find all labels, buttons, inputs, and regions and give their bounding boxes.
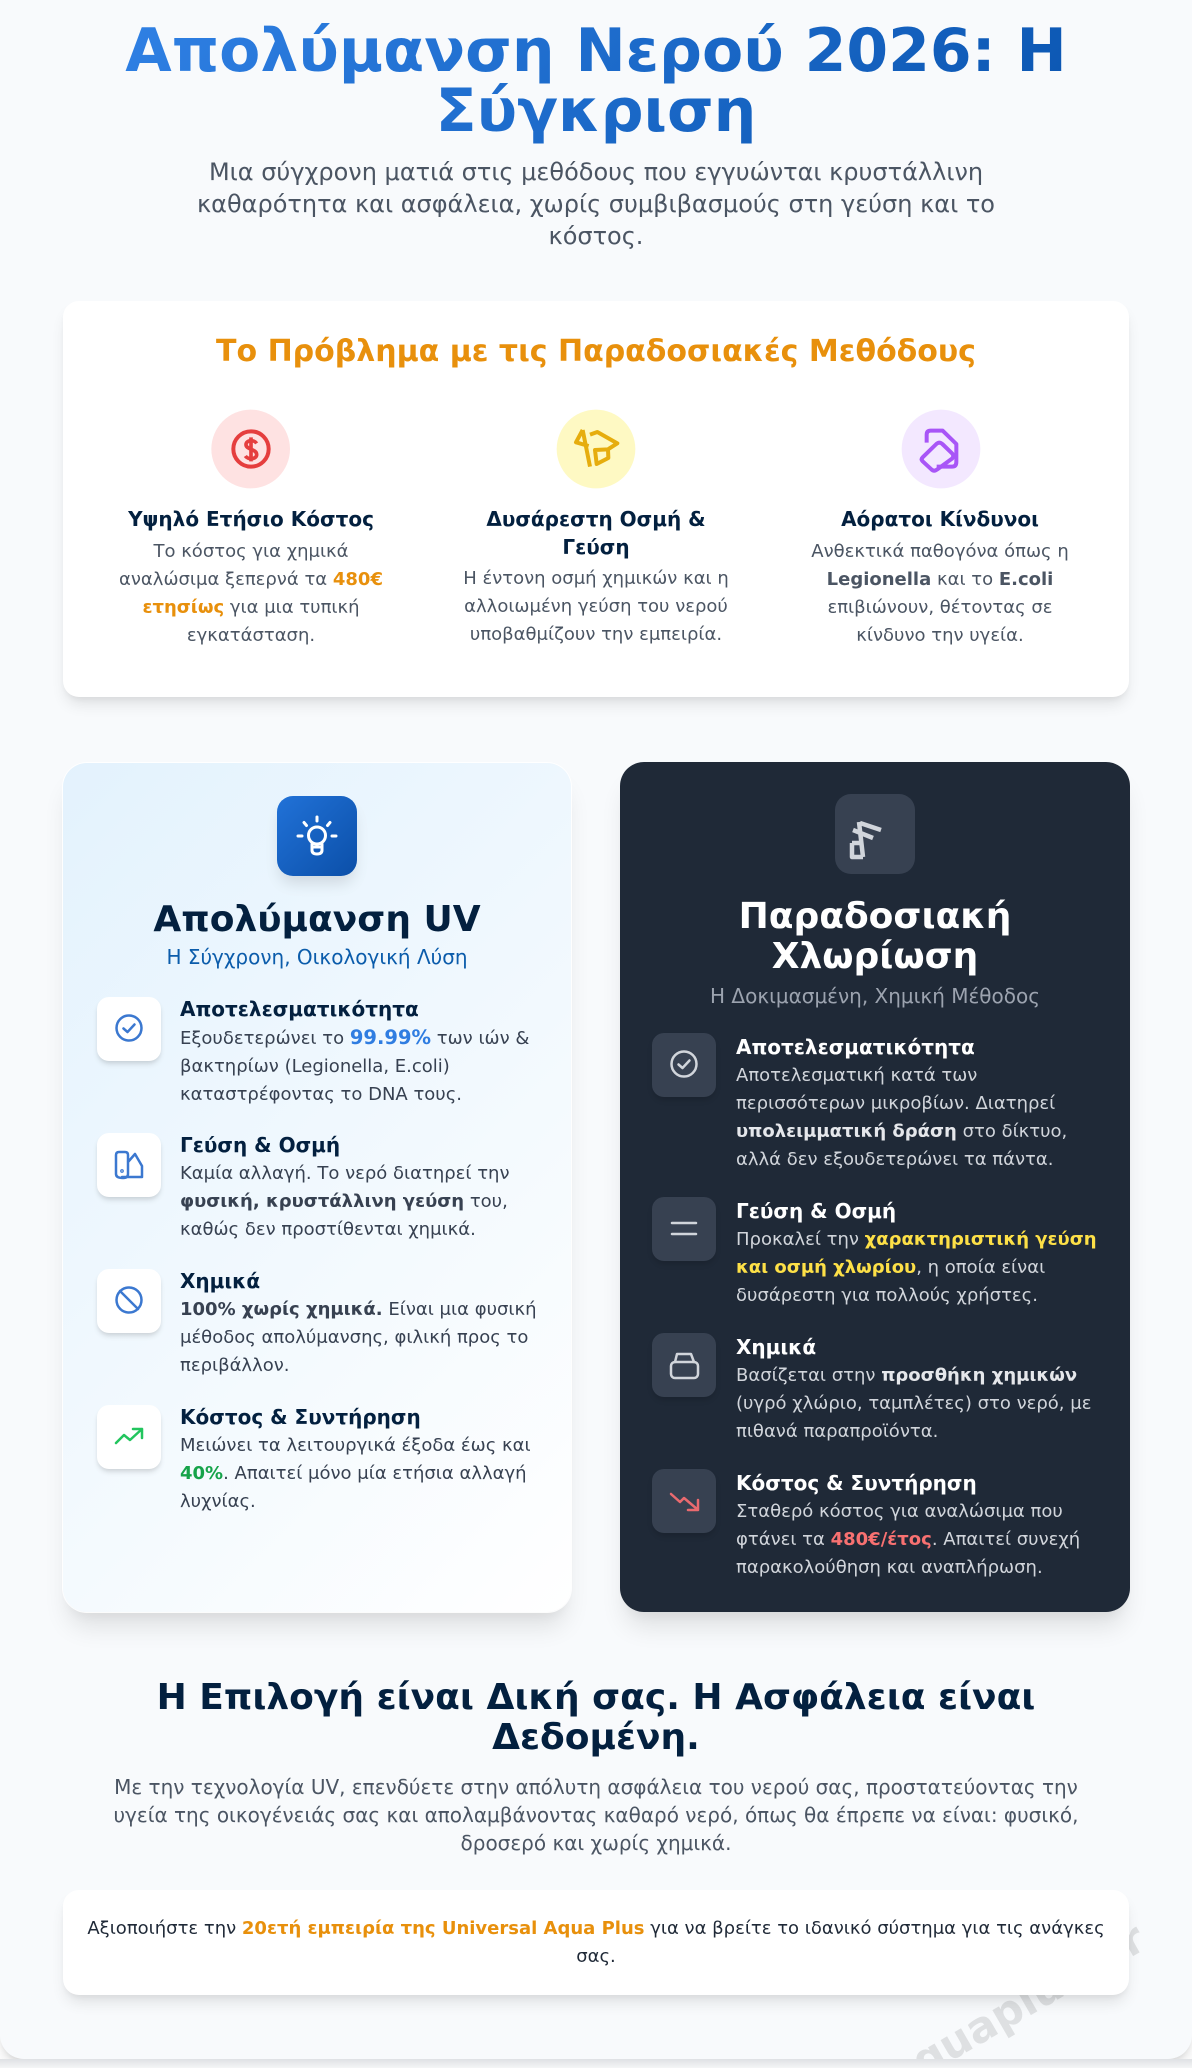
feature: UV cost: 40%. Απαιτεί μόνο μία ετήσια αλλαγή (180, 1463, 527, 1484)
heading: conclusion: Η Επιλογή είναι Δική σας. Η Ασφάλεια είναι (157, 1677, 1035, 1718)
callout (63, 1890, 1129, 1995)
problem item: smell: υποβαθμίζουν την εμπειρία. (470, 624, 722, 645)
problem item: dangers: επιβιώνουν, θέτοντας σε (827, 597, 1053, 618)
feature: chlorine effectiveness: υπολειμματική δράση στο δίκτυο, (736, 1121, 1067, 1142)
problem item: dangers: Legionella και το E.coli (827, 569, 1053, 590)
feature: UV effectiveness: Αποτελεσματικότητα (180, 997, 419, 1021)
problem item: smell (463, 507, 729, 645)
feature: chlorine chemicals (652, 1333, 1091, 1442)
feature: chlorine taste (652, 1197, 1097, 1306)
problem item: dangers (811, 507, 1069, 646)
problem item: dangers: κίνδυνο την υγεία. (856, 625, 1024, 646)
problem item: smell: Γεύση (562, 535, 630, 559)
icon: dollar (211, 410, 290, 488)
problem item: cost: αναλώσιμα ξεπερνά τα 480€ (119, 569, 383, 590)
feature: UV chemicals (96, 1269, 536, 1376)
subtitle: καθαρότητα και ασφάλεια, χωρίς συμβιβασμούς στη γεύση και το (197, 190, 995, 218)
feature: UV cost (96, 1405, 531, 1512)
subtitle (197, 158, 995, 250)
problem item: smell: Η έντονη οσμή χημικών και η (463, 568, 729, 589)
problem item: cost: ετησίως για μια τυπική (142, 597, 360, 618)
problem item: smell: Δυσάρεστη Οσμή & (486, 507, 706, 531)
feature: UV effectiveness: καταστρέφοντας το DNA τους. (180, 1084, 462, 1105)
subtitle: UV: Η Σύγχρονη, Οικολογική Λύση (166, 945, 468, 969)
text: conclusion paragraph: Με την τεχνολογία UV, επενδύετε στην απόλυτη ασφάλεια του νερού σας, προστατεύοντας την (114, 1775, 1078, 1799)
text: conclusion paragraph: δροσερό και χωρίς χημικά. (461, 1831, 731, 1855)
heading: chlorination: Παραδοσιακή (739, 896, 1011, 937)
feature: UV effectiveness (96, 997, 529, 1105)
feature: chlorine cost: Κόστος & Συντήρηση (736, 1471, 977, 1495)
feature: UV chemicals: Χημικά (180, 1269, 260, 1293)
problem item: smell: αλλοιωμένη γεύση του νερού (464, 596, 728, 617)
text: conclusion paragraph (113, 1775, 1079, 1855)
heading: UV: Απολύμανση UV (153, 899, 481, 940)
feature: chlorine chemicals: πιθανά παραπροϊόντα. (736, 1421, 938, 1442)
subtitle: chlorination: Η Δοκιμασμένη, Χημική Μέθοδος (710, 984, 1040, 1008)
title (125, 16, 1067, 146)
subtitle: Μια σύγχρονη ματιά στις μεθόδους που εγγυώνται κρυστάλλινη (209, 158, 983, 186)
feature: chlorine taste: Γεύση & Οσμή (736, 1199, 896, 1223)
icon: light bulb (277, 796, 357, 876)
feature: chlorine taste: και οσμή χλωρίου, η οποία είναι (736, 1257, 1045, 1278)
feature: UV cost: Μειώνει τα λειτουργικά έξοδα έως και (180, 1435, 531, 1456)
callout: Αξιοποιήστε την 20ετή εμπειρία της Universal Aqua Plus για να βρείτε το ιδανικό σύστημα για τις ανάγκες (87, 1918, 1105, 1939)
feature: chlorine taste: δυσάρεστη για πολλούς χρήστες. (736, 1285, 1038, 1306)
problem item: cost: Υψηλό Ετήσιο Κόστος (128, 507, 374, 531)
icon: hidden danger (902, 410, 980, 488)
feature: UV taste: Γεύση & Οσμή (180, 1133, 340, 1157)
feature: UV cost: Κόστος & Συντήρηση (180, 1405, 421, 1429)
callout: σας. (576, 1946, 616, 1967)
icon: graduation shape (556, 410, 636, 488)
heading: chlorination: Χλωρίωση (772, 936, 978, 977)
feature: UV taste (96, 1133, 510, 1240)
feature: UV taste: Καμία αλλαγή. Το νερό διατηρεί την (180, 1163, 510, 1184)
problem item: cost: εγκατάσταση. (187, 625, 315, 646)
heading: chlorination (739, 896, 1011, 977)
feature: UV chemicals: περιβάλλον. (180, 1355, 290, 1376)
problem item: dangers: Αόρατοι Κίνδυνοι (841, 507, 1039, 531)
text: conclusion paragraph: υγεία της οικογένειάς σας και απολαμβάνοντας καθαρό νερό, όπως θα έπρεπε να είναι: φυσικό, (113, 1803, 1079, 1827)
feature: chlorine effectiveness: αλλά δεν εξουδετερώνει τα πάντα. (736, 1149, 1053, 1170)
problem item: dangers: Ανθεκτικά παθογόνα όπως η (811, 541, 1069, 562)
feature: UV chemicals: μέθοδος απολύμανσης, φιλική προς το (180, 1327, 528, 1348)
panel: UV (63, 763, 571, 1612)
heading: conclusion (157, 1677, 1035, 1758)
feature: chlorine chemicals: Χημικά (736, 1335, 816, 1359)
feature: chlorine cost: παρακολούθηση και αναπλήρωση. (736, 1557, 1043, 1578)
feature: chlorine cost: φτάνει τα 480€/έτος. Απαιτεί συνεχή (736, 1529, 1080, 1550)
feature: UV taste: φυσική, κρυστάλλινη γεύση του, (180, 1191, 508, 1212)
problem item: cost (119, 507, 383, 646)
subtitle: κόστος. (549, 222, 643, 250)
problem item: cost: Το κόστος για χημικά (153, 541, 349, 562)
title: Απολύμανση Νερού 2026: Η (125, 16, 1067, 86)
heading: conclusion: Δεδομένη. (492, 1717, 700, 1758)
feature: UV effectiveness: Εξουδετερώνει το 99.99% των ιών & (180, 1026, 529, 1049)
feature: chlorine cost (652, 1469, 1080, 1578)
page bottom shadow band (0, 2059, 1192, 2068)
feature: UV cost: λυχνίας. (180, 1491, 256, 1512)
feature: chlorine effectiveness (652, 1033, 1067, 1170)
feature: chlorine effectiveness: Αποτελεσματική κατά των (736, 1065, 977, 1086)
panel: chlorination (620, 762, 1130, 1612)
panel: problem (63, 301, 1129, 697)
feature: UV chemicals: 100% χωρίς χημικά. Είναι μια φυσική (180, 1299, 536, 1320)
feature: chlorine taste: Προκαλεί την χαρακτηριστική γεύση (736, 1229, 1097, 1250)
feature: chlorine cost: Σταθερό κόστος για αναλώσιμα που (736, 1501, 1063, 1522)
feature: UV taste: καθώς δεν προστίθενται χημικά. (180, 1219, 476, 1240)
title: Σύγκριση (436, 76, 756, 146)
feature: UV effectiveness: βακτηρίων (Legionella, E.coli) (180, 1056, 450, 1077)
feature: chlorine chemicals: Βασίζεται στην προσθήκη χημικών (736, 1365, 1077, 1386)
feature: chlorine effectiveness: περισσότερων μικροβίων. Διατηρεί (736, 1093, 1055, 1114)
icon: faucet (835, 794, 915, 874)
feature: chlorine effectiveness: Αποτελεσματικότητα (736, 1035, 975, 1059)
feature: chlorine chemicals: (υγρό χλώριο, ταμπλέτες) στο νερό, με (736, 1393, 1091, 1414)
heading: problem: Το Πρόβλημα με τις Παραδοσιακές Μεθόδους (216, 334, 976, 369)
